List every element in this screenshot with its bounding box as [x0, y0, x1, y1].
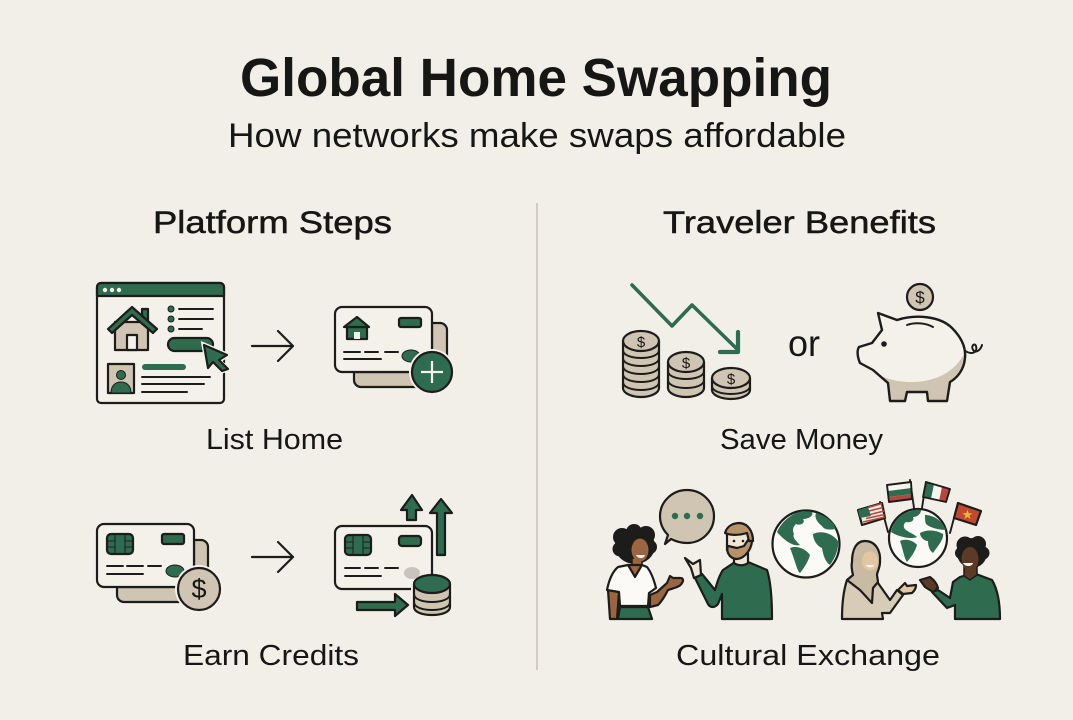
icon: card with dollar coin — [97, 524, 223, 613]
icon: card with rising credits — [335, 495, 453, 618]
icon: home listing browser window — [97, 283, 228, 403]
icon: card with dollar coin: $ — [191, 574, 207, 604]
text: or: or — [788, 323, 820, 364]
icon: globe left — [772, 510, 840, 578]
icon: coin stacks with falling trend: $ — [727, 371, 736, 388]
icon: coin stacks with falling trend: $ — [682, 355, 691, 372]
flag: vietnam: ★ — [962, 507, 973, 522]
icon: piggy bank — [858, 284, 982, 401]
icon: card with plus — [335, 307, 455, 395]
label: save money: Save Money — [720, 424, 884, 456]
man in green sweater — [920, 536, 1000, 619]
subtitle: How networks make swaps affordable — [228, 117, 846, 155]
woman — [607, 524, 683, 619]
title: Global Home Swapping — [240, 48, 832, 108]
speech bubble — [660, 490, 714, 544]
icon: coin stacks with falling trend: $ — [637, 334, 646, 351]
heading: platform steps: Platform Steps — [153, 204, 392, 240]
arrow: credits — [252, 542, 293, 572]
icon: globe with flags — [858, 480, 981, 567]
illustration: two people in conversation — [607, 490, 772, 619]
flag: italy — [923, 482, 950, 502]
arrow: list to card — [252, 331, 293, 361]
icon: piggy bank: $ — [915, 288, 925, 307]
flag: bulgaria — [887, 482, 912, 502]
label: list home: List Home — [206, 424, 343, 456]
heading: traveler benefits: Traveler Benefits — [663, 204, 936, 240]
woman in hijab — [842, 541, 916, 619]
label: cultural exchange: Cultural Exchange — [676, 640, 940, 672]
man — [685, 523, 772, 619]
flag: united states — [858, 503, 885, 525]
icon: coin stacks with falling trend — [623, 285, 750, 399]
label: earn credits: Earn Credits — [183, 640, 359, 672]
illustration: two people with flags — [842, 536, 1000, 619]
